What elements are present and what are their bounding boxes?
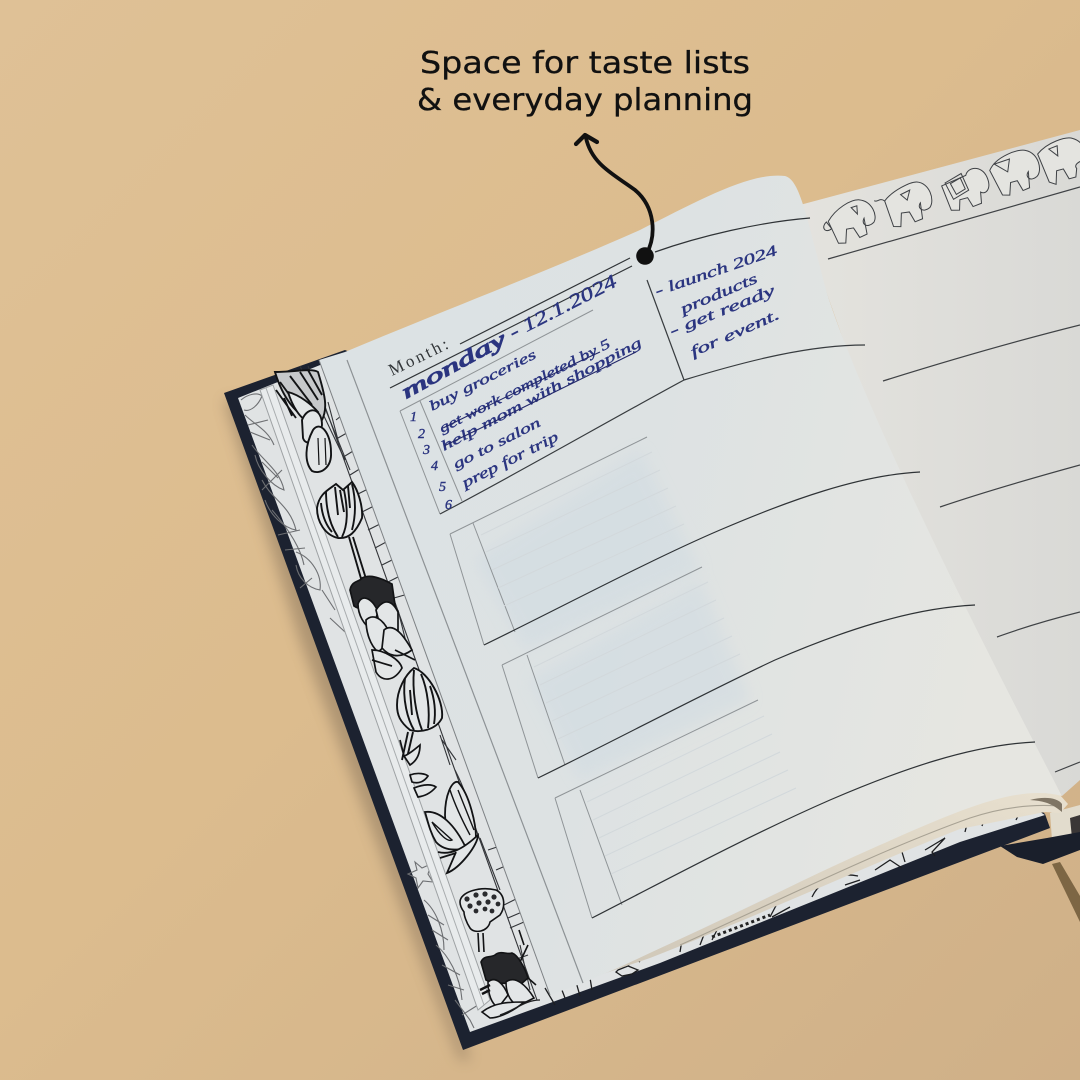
title: Space for taste lists [420,46,750,81]
handwritten row numbers: 1 [410,410,417,425]
tiny printed marks on page edge [712,915,770,937]
elephant border [819,134,1080,248]
flower: leaves [400,740,436,797]
flower: tulip lower [397,668,442,760]
cover shadow [224,400,470,1060]
back cover and back pages [1000,805,1080,864]
paper strip between endpapers [260,385,490,1010]
handwritten row numbers: 2 [418,427,425,442]
page margin line [347,360,583,983]
handwritten side notes: for event. [688,307,782,361]
handwritten to-do list: go to salon [451,416,543,473]
handwritten date heading [398,271,621,403]
ribbon [1052,862,1080,922]
page outer edge line [319,360,550,995]
flower: bottom bloom [480,930,536,1018]
month label: Month: [385,334,451,380]
handwritten to-do list: help mom with shopping [439,336,645,455]
elephant 1 [819,196,881,248]
header lines [390,218,810,388]
bottom edge flowers [500,812,1040,1015]
flower: lotus bloom [350,576,415,679]
flower: tulip [317,482,367,582]
handwritten date heading: monday [398,328,510,403]
endpaper floral page [238,355,1045,1032]
soft blue tint [475,450,750,780]
right page planner lines [828,187,1080,772]
handwritten to-do list [427,336,645,492]
to-do table [400,310,593,514]
title: & everyday planning [417,83,753,118]
handwritten side notes [653,243,782,361]
floral band right edge hatch [300,366,537,1000]
handwritten to-do list: get work completed by 5 [437,337,613,437]
handwritten side notes: products [677,271,760,318]
title [417,46,753,118]
planner box 4 [555,700,1035,918]
handwritten row numbers [410,410,452,513]
handwritten row numbers: 6 [445,498,452,513]
flower: open bloom [425,782,478,873]
elephant 3 [939,166,994,213]
elephant 4 [987,146,1045,198]
page edge stack [600,793,1068,975]
section dividers [440,280,865,514]
handwritten row numbers: 5 [439,480,446,495]
handwritten to-do list: prep for trip [458,429,562,492]
handwritten row numbers: 4 [431,459,438,474]
planner box 3 [502,567,975,778]
flower: lotus pods top [275,370,331,472]
handwritten row numbers: 3 [422,443,430,458]
handwritten to-do list: buy groceries [427,347,540,415]
book cover [224,350,1050,1050]
left endpaper sketched leaves [241,394,478,1028]
left planner page [319,176,1062,995]
handwritten side notes: - launch 2024 [653,243,780,300]
right page [796,130,1080,796]
flower: seed pod [460,889,504,952]
callout arrow [576,135,654,265]
elephant 5 [1036,134,1080,187]
handwritten date heading: - 12.1.2024 [506,271,621,343]
elephant 2 [872,179,937,232]
planner box 2 [450,437,920,645]
handwritten side notes: - get ready [668,283,778,340]
